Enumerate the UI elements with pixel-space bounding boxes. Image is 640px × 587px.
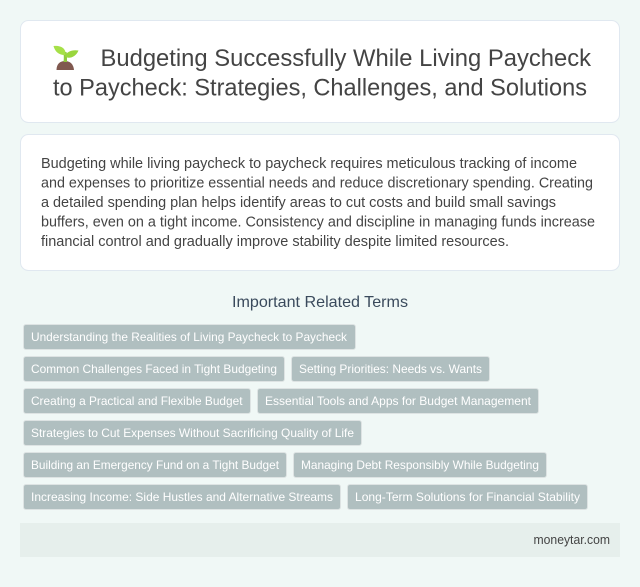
tag: Common Challenges Faced in Tight Budgeting xyxy=(31,362,277,376)
tag xyxy=(24,452,286,478)
tag: Creating a Practical and Flexible Budget xyxy=(31,394,243,408)
summary text xyxy=(41,156,595,250)
title: Budgeting Successfully While Living Paycheck xyxy=(100,45,592,72)
tag: Long-Term Solutions for Financial Stability xyxy=(355,490,580,504)
heading: important related terms: Important Related Terms xyxy=(232,294,408,311)
tag xyxy=(24,388,250,414)
summary text: Budgeting while living paycheck to paycheck requires meticulous tracking of income xyxy=(41,156,577,172)
tag xyxy=(24,324,356,350)
footer source: moneytar.com xyxy=(534,532,610,547)
summary text: a detailed spending plan helps identify areas to cut costs and build small savings xyxy=(41,195,556,211)
tag xyxy=(24,484,340,510)
tag xyxy=(258,388,538,414)
tag xyxy=(348,484,588,510)
footer xyxy=(20,523,620,557)
title: to Paycheck: Strategies, Challenges, and Solutions xyxy=(53,74,587,102)
tag xyxy=(294,452,546,478)
tag xyxy=(24,420,362,446)
tag: Increasing Income: Side Hustles and Alternative Streams xyxy=(31,490,333,504)
icon: seedling xyxy=(54,46,78,70)
tag: Strategies to Cut Expenses Without Sacrificing Quality of Life xyxy=(31,426,354,440)
tag: Building an Emergency Fund on a Tight Budget xyxy=(31,458,280,472)
tag: Understanding the Realities of Living Paycheck to Paycheck xyxy=(31,330,348,344)
panel: related term tags xyxy=(24,324,588,510)
summary text: and expenses to prioritize essential needs and reduce discretionary spending. Creating xyxy=(41,176,593,192)
summary text: buffers, even on a tight income. Consistency and discipline in managing funds increase xyxy=(41,214,595,230)
summary text: financial control and gradually improve stability despite limited resources. xyxy=(41,234,509,250)
tag xyxy=(24,356,284,382)
title xyxy=(53,45,592,102)
tag: Setting Priorities: Needs vs. Wants xyxy=(299,362,482,376)
tag: Essential Tools and Apps for Budget Management xyxy=(265,394,532,408)
tag xyxy=(292,356,490,382)
tag: Managing Debt Responsibly While Budgeting xyxy=(301,458,539,472)
panel: summary paragraph xyxy=(20,134,620,270)
panel: title card xyxy=(20,20,620,122)
